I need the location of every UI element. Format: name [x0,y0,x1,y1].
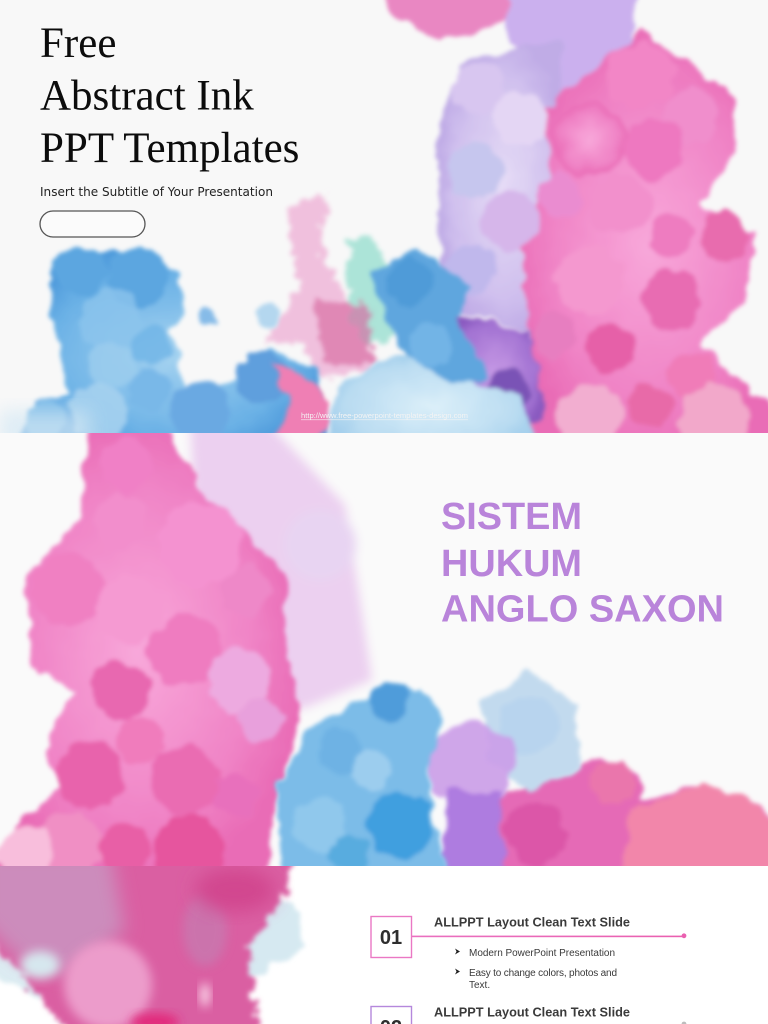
source link: http://www.free-powerpoint-templates-design.com [301,413,468,420]
panel: slide 1 ink artwork [0,0,768,460]
ink: right pink trail [496,755,768,866]
ink: dark rose top [195,868,275,912]
ink: large pink and lavender column on the right [375,0,768,460]
ink: pale blue and purple puffs [426,667,584,866]
heading: Sistem Hukum Anglo Saxon: SISTEM [441,496,582,538]
connector line with dot [412,933,686,938]
title [40,20,299,172]
ink: pale streak [200,983,210,1007]
title: PPT Templates [40,125,299,172]
number box 01: 01 [380,927,402,949]
heading 01: ALLPPT Layout Clean Text Slide [434,914,630,930]
ink: central blue cloud [275,682,450,890]
heading 02: ALLPPT Layout Clean Text Slide [434,1004,630,1020]
ink: sprayed pink and teal plume [262,195,392,378]
ink: pale lavender plume [190,420,372,710]
ink: pale fade at the bottom left [0,410,90,450]
ink: pale pink puff [64,941,152,1024]
ink: bright pink base [131,1013,179,1024]
heading: Sistem Hukum Anglo Saxon: HUKUM [441,543,582,585]
number box 02 [371,1006,412,1024]
ink: big pink cloud [0,415,300,890]
bullet 1 arrow [455,948,460,954]
ink: pink patch at the bottom centre [270,361,332,433]
bullet 1 text: Modern PowerPoint Presentation [469,948,615,959]
heading: Sistem Hukum Anglo Saxon: ANGLO SAXON [441,588,724,630]
ink: pale wisp [20,951,60,979]
title: Free [40,20,116,67]
bullet 2 text [469,968,617,991]
ink: blue cloud on the left [18,244,330,433]
bullet 2 text: Easy to change colors, photos and [469,968,617,979]
panel: slide 1 background [0,0,768,433]
panel: slide 3 background [0,866,768,1024]
ink: pale blue halo [0,899,306,1000]
ink: central violet wash [183,894,227,966]
panel: slide 3 ink artwork [0,866,306,1024]
bullet 2 text: Text. [469,980,490,991]
panel: slide 2 ink artwork [0,415,768,890]
ink: left mauve wash [0,850,125,975]
panel: list item 02 [371,1004,686,1024]
dot 02 [682,1022,686,1024]
ink: mauve and pink cloud [0,866,296,1024]
empty pill button [40,211,145,237]
panel: list item 01 [371,914,686,991]
bullet 2 arrow [455,968,460,974]
panel: slide 2 background [0,433,768,866]
subtitle: Insert the Subtitle of Your Presentation [40,185,273,199]
title: Abstract Ink [40,72,254,120]
number box 01 [371,916,412,958]
ink: blue and purple mass at the base [328,246,548,433]
heading: Sistem Hukum Anglo Saxon [441,496,724,630]
